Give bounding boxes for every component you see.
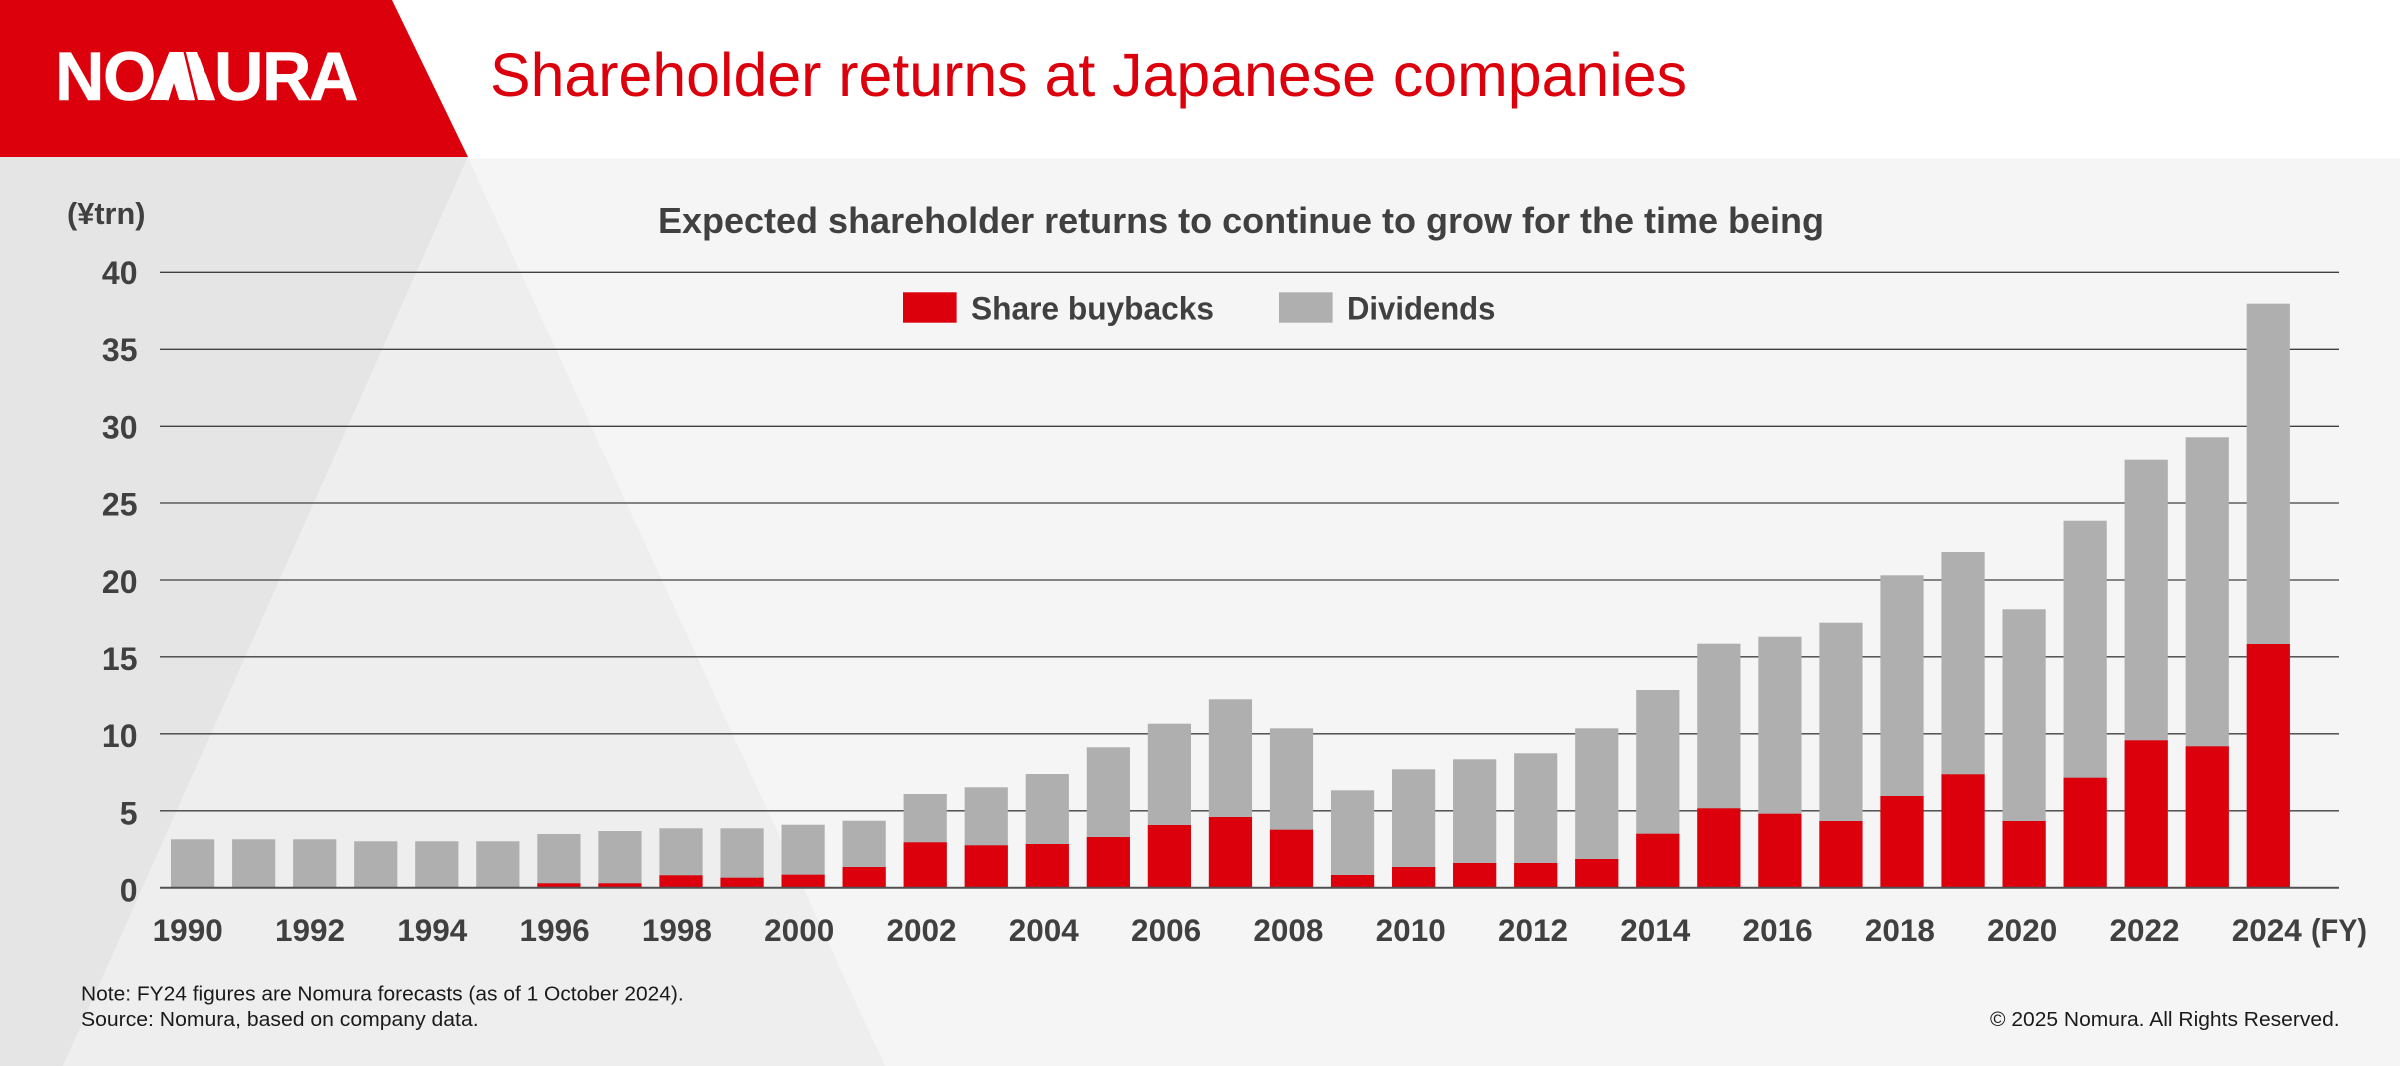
legend <box>903 290 1495 326</box>
x axis year labels: 2018 <box>1865 912 1935 948</box>
y axis labels: 15 <box>102 641 138 677</box>
y axis labels: 35 <box>102 332 138 368</box>
x axis year labels: 2008 <box>1253 912 1323 948</box>
x axis year labels: 2022 <box>2109 912 2180 948</box>
title: Shareholder returns at Japanese companies <box>490 41 1687 109</box>
x axis year labels: 1996 <box>520 912 590 948</box>
x axis year labels: 2020 <box>1987 912 2057 948</box>
y axis labels: 5 <box>120 795 138 831</box>
x axis year labels <box>153 912 2302 948</box>
x axis year labels: 1994 <box>397 912 468 948</box>
chart subtitle: Expected shareholder returns to continue to grow for the time being <box>658 200 1824 241</box>
y axis labels: 40 <box>102 255 138 291</box>
x axis year labels: 2010 <box>1376 912 1446 948</box>
footnote: note and source: Source: Nomura, based on company data. <box>81 1009 479 1031</box>
x axis baseline <box>160 887 2339 889</box>
x axis year labels: 1990 <box>153 912 223 948</box>
footnote: note and source <box>81 984 684 1031</box>
x axis year labels: 2012 <box>1498 912 1568 948</box>
legend item: dividends <box>1279 290 1495 326</box>
bar series: share buybacks <box>537 644 2290 888</box>
y axis labels: 10 <box>102 718 138 754</box>
x axis year labels: 2024 <box>2232 912 2302 948</box>
x axis year labels: 2016 <box>1743 912 1813 948</box>
x axis year labels: 2002 <box>886 912 957 948</box>
x axis year labels: 2014 <box>1620 912 1691 948</box>
header: red logo panel <box>0 0 468 157</box>
x axis unit label: (FY) <box>2311 912 2367 948</box>
legend item: dividends: Dividends <box>1347 290 1495 326</box>
y axis labels: 0 <box>120 873 138 909</box>
x axis year labels: 1998 <box>642 912 712 948</box>
x axis year labels: 1992 <box>275 912 345 948</box>
copyright: © 2025 Nomura. All Rights Reserved. <box>1990 1009 2340 1031</box>
y axis labels: 30 <box>102 409 138 445</box>
y axis labels: 25 <box>102 487 138 523</box>
y axis unit label: (¥trn) <box>67 196 146 231</box>
x axis year labels: 2004 <box>1009 912 1079 948</box>
footnote: note and source: Note: FY24 figures are Nomura forecasts (as of 1 October 2024). <box>81 984 684 1006</box>
x axis year labels: 2006 <box>1131 912 1201 948</box>
x axis year labels: 2000 <box>764 912 834 948</box>
legend item: share buybacks: Share buybacks <box>971 290 1214 326</box>
y axis labels <box>102 255 138 909</box>
logo: NOMURA wordmark: NOMURA <box>55 38 358 115</box>
y axis labels: 20 <box>102 564 138 600</box>
bar series: dividends <box>171 304 2290 888</box>
